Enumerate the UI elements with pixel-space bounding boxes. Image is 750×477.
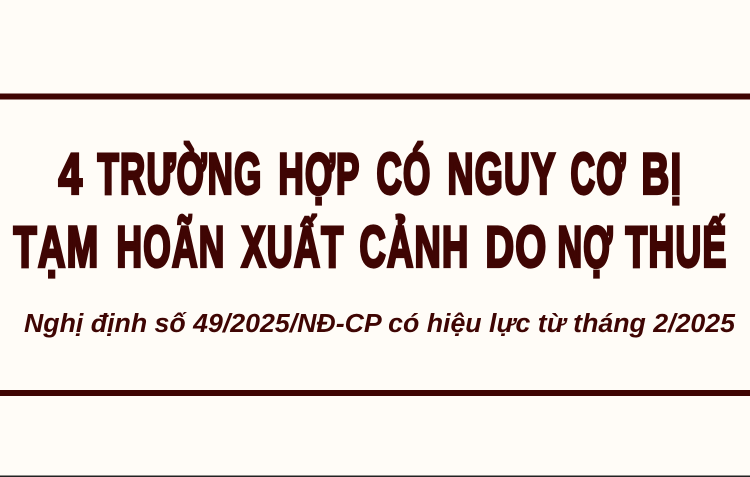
title: BỊ	[642, 142, 682, 206]
title: NỢ	[558, 216, 614, 280]
title: CẢNH	[360, 214, 470, 280]
title: DO	[486, 216, 548, 280]
title: XUẤT	[242, 214, 344, 280]
subtitle: Nghị định số 49/2025/NĐ-CP có hiệu lực từ tháng 2/2025	[24, 310, 736, 338]
title: TRƯỜNG	[98, 142, 262, 206]
title: CÓ	[376, 142, 432, 206]
title: CƠ	[570, 142, 626, 206]
title	[14, 142, 728, 280]
title: NGUY	[448, 142, 556, 206]
title: HỢP	[278, 142, 360, 206]
title: HOÃN	[116, 216, 226, 280]
title: TẠM	[14, 216, 100, 280]
title: 4	[58, 142, 84, 206]
